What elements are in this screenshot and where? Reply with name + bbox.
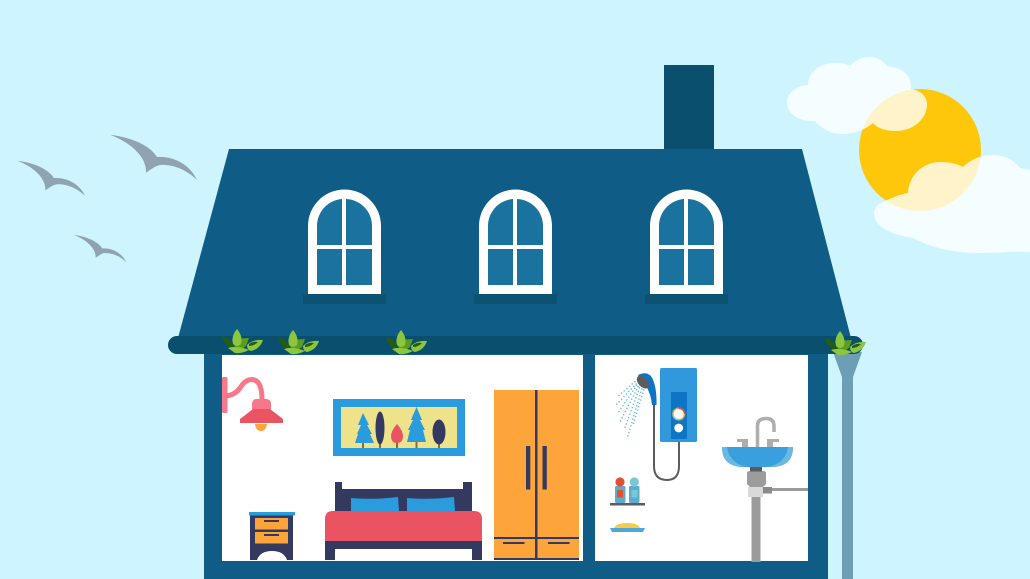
wall lamp <box>222 377 283 431</box>
window: left <box>303 189 386 304</box>
nightstand <box>249 512 295 560</box>
sink drain pipe <box>747 467 808 562</box>
leaves: cluster 1 <box>222 329 263 353</box>
cloud: upper <box>787 57 927 134</box>
roof <box>178 149 851 338</box>
gutter <box>168 336 863 354</box>
soap dish <box>610 523 645 532</box>
house walls <box>204 350 828 579</box>
bird: small <box>74 235 126 262</box>
heater dial <box>673 408 684 420</box>
cloud: lower right <box>874 155 1030 253</box>
birds <box>17 135 197 262</box>
water spray <box>616 379 645 439</box>
bed <box>325 482 482 560</box>
window: centre <box>474 189 557 304</box>
shower handset <box>634 373 657 405</box>
faucet <box>737 418 779 448</box>
tree: red <box>391 424 403 448</box>
shower hose <box>654 405 679 480</box>
tree: dark round <box>432 420 446 448</box>
wardrobe <box>494 390 579 560</box>
water heater <box>660 368 697 442</box>
bottles on shelf <box>610 477 645 506</box>
chimney <box>664 65 714 150</box>
bird: large <box>110 135 197 180</box>
tree: blue left <box>355 413 374 448</box>
tree: blue right <box>407 407 426 448</box>
leaves: cluster 2 <box>278 330 319 354</box>
sun <box>859 89 981 211</box>
tree: dark tall <box>376 412 384 448</box>
room: bathroom <box>595 355 808 561</box>
bird: medium <box>17 161 85 196</box>
sink basin <box>722 447 793 467</box>
downspout <box>833 352 862 579</box>
leaves: cluster 3 <box>386 330 427 354</box>
framed picture <box>333 399 465 456</box>
room: bedroom <box>222 355 583 561</box>
window: right <box>645 189 728 304</box>
leaves: cluster 4 <box>825 331 866 355</box>
